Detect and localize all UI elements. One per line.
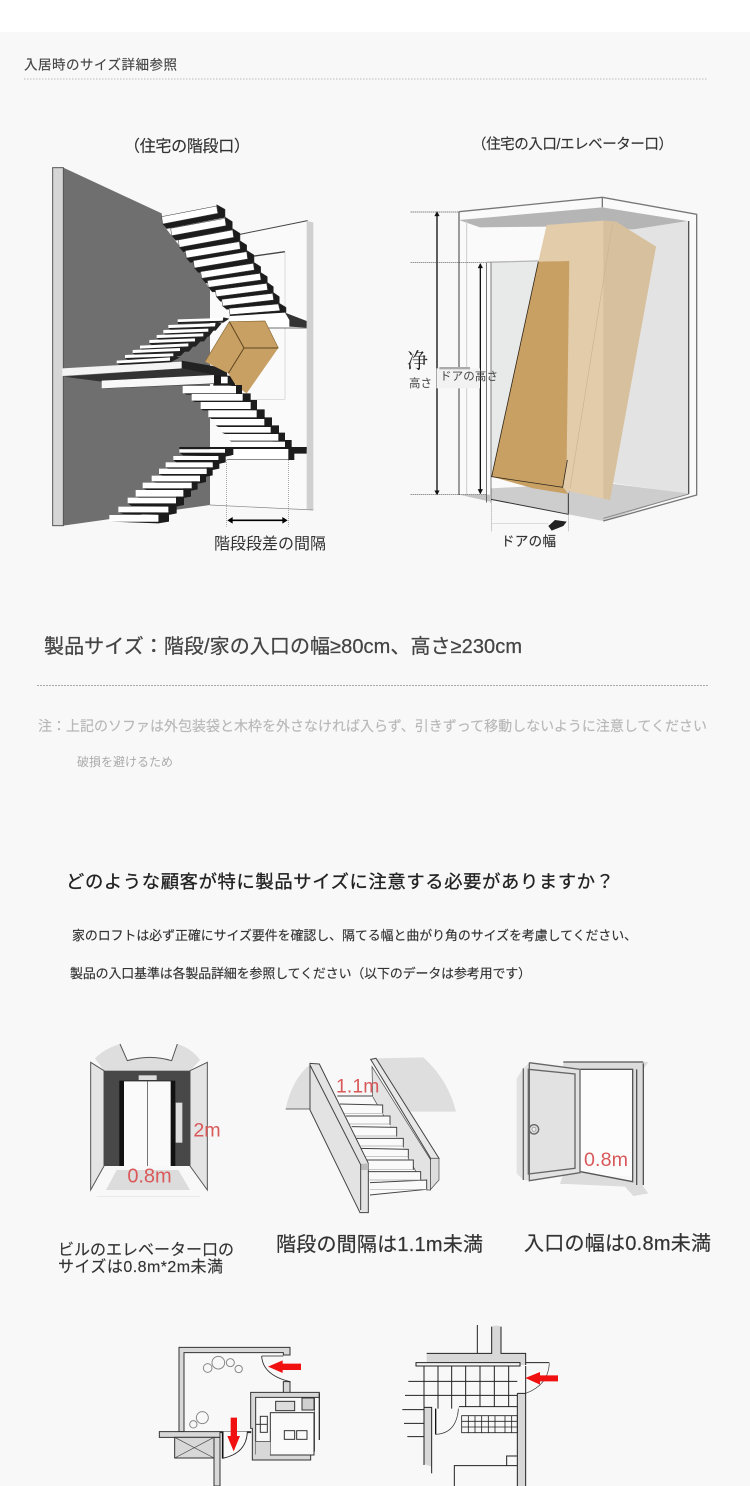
icon: door xyxy=(517,1062,648,1196)
clear height label: 高さ xyxy=(409,377,432,390)
door width label: ドアの幅 xyxy=(501,534,556,549)
upper landing xyxy=(230,313,307,328)
sofa box xyxy=(492,221,656,500)
door and elevator entrance illustration xyxy=(411,197,697,532)
arrow: door entry down xyxy=(227,1418,240,1451)
door caption: 入口の幅は0.8m未満 xyxy=(524,1232,711,1255)
note continuation: 破損を避けるため xyxy=(77,754,173,769)
middle flight steps xyxy=(117,317,229,365)
elevator caption xyxy=(58,1241,234,1276)
section heading: 入居時のサイズ詳細参照 xyxy=(24,58,177,72)
door height label: ドアの高さ xyxy=(440,370,498,383)
note text: 注：上記のソファは外包装袋と木枠を外さなければ入らず、引きずって移動しないように注意してください xyxy=(38,718,707,734)
stair width value: 1.1m xyxy=(336,1077,379,1098)
right wall xyxy=(210,221,313,510)
product size headline: 製品サイズ：階段/家の入口の幅≥80cm、高さ≥230cm xyxy=(44,635,522,658)
body line 2: 製品の入口基準は各製品詳細を参照してください（以下のデータは参考用です） xyxy=(70,966,531,981)
left wall xyxy=(53,168,210,526)
elevator caption: サイズは0.8m*2m未満 xyxy=(58,1258,223,1276)
floor plan: right xyxy=(402,1325,558,1486)
clear height label: 净 xyxy=(407,345,428,375)
door caption: （住宅の入口/エレベーター口） xyxy=(472,136,673,153)
arrow: entry xyxy=(525,1372,558,1385)
body line 1: 家のロフトは必ず正確にサイズ要件を確認し、隔てる幅と曲がり角のサイズを考慮してください、 xyxy=(72,928,637,943)
stair caption: 階段の間隔は1.1m未満 xyxy=(276,1233,483,1256)
middle platform xyxy=(62,361,235,389)
staircase entrance illustration xyxy=(53,168,313,527)
room shell xyxy=(459,197,697,521)
staircase caption: （住宅の階段口） xyxy=(124,138,250,156)
cardboard box xyxy=(205,321,278,393)
arrow: door entry right xyxy=(268,1360,301,1373)
lower flight steps xyxy=(109,448,232,523)
width dimension arrow xyxy=(227,460,289,527)
floor plan: left xyxy=(159,1347,319,1486)
lower middle steps xyxy=(183,385,292,449)
question heading: どのような顧客が特に製品サイズに注意する必要がありますか？ xyxy=(66,871,614,892)
height dimension lines xyxy=(411,211,487,495)
door panel xyxy=(487,260,572,514)
width value: 0.8m xyxy=(127,1166,172,1188)
lower landing xyxy=(179,447,307,460)
icon: elevator xyxy=(91,1044,221,1197)
elevator caption: ビルのエレベーター口の xyxy=(58,1241,234,1259)
clear height label xyxy=(407,345,432,390)
width label: 階段段差の間隔 xyxy=(214,535,326,553)
door width value: 0.8m xyxy=(584,1149,628,1171)
smudged label backing xyxy=(437,367,480,388)
door width marker xyxy=(492,503,568,532)
upper flight steps xyxy=(162,205,286,317)
icon: staircase xyxy=(286,1057,456,1213)
height value: 2m xyxy=(193,1119,221,1141)
